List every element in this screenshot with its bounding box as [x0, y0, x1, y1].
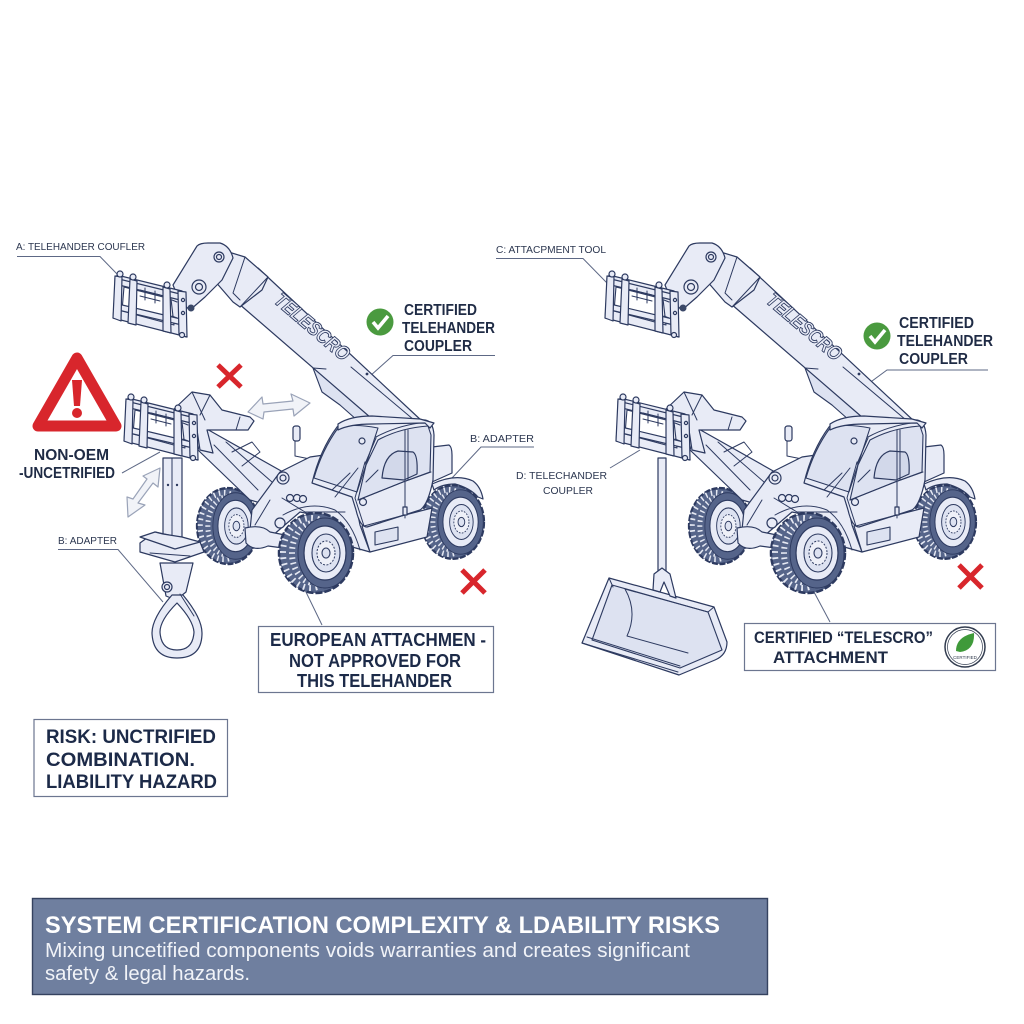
- callout: european attachment: [258, 626, 494, 692]
- label: telechander coupler: [516, 470, 607, 497]
- icon: red cross top: [218, 365, 241, 387]
- leader: adapter lower: [58, 550, 163, 602]
- label: telechander coupler: D: TELECHANDER: [516, 470, 607, 482]
- callout: certified attachment: ATTACHMENT: [773, 648, 889, 667]
- leader: attachment tool: [496, 258, 607, 283]
- label: attachment tool: C: ATTACPMENT TOOL: [496, 244, 606, 256]
- icon: red cross right: [959, 565, 982, 588]
- label: certified coupler: COUPLER: [404, 338, 472, 355]
- label: certified coupler right: COUPLER: [899, 351, 968, 368]
- callout: risk statement: COMBINATION.: [46, 750, 195, 771]
- label: adapter lower: B: ADAPTER: [58, 535, 117, 547]
- adapter base plates: [140, 532, 204, 562]
- double arrow: horizontal: [248, 394, 310, 419]
- leader: telehander coupler A: [17, 256, 118, 275]
- label: certified coupler right: TELEHANDER: [897, 333, 993, 350]
- leader: boom right: [868, 370, 988, 384]
- panel: non-certified combination: [16, 241, 534, 692]
- label: telechander coupler: COUPLER: [543, 485, 593, 497]
- adapter post: [163, 458, 182, 542]
- icon: red cross bottom: [462, 570, 485, 593]
- body text: safety & legal hazards.: [45, 963, 250, 985]
- icon: eco seal: CERTIFIED: [953, 655, 978, 660]
- bucket attachment: [582, 568, 727, 675]
- label: certified coupler: CERTIFIED: [404, 302, 477, 319]
- label: telehander coupler A: A: TELEHANDER COUFLER: [16, 241, 145, 253]
- leader: right wheel: [814, 592, 830, 622]
- callout: european attachment: NOT APPROVED FOR: [289, 651, 461, 671]
- leader: telechander coupler: [610, 450, 640, 468]
- label: non-OEM warning: -UNCETRIFIED: [19, 465, 115, 482]
- callout: risk statement: LIABILITY HAZARD: [46, 772, 217, 793]
- leader: rear adapter: [452, 447, 534, 478]
- banner: summary: [32, 898, 768, 994]
- leader: non-OEM: [122, 452, 160, 473]
- label: adapter rear: B: ADAPTER: [470, 433, 534, 445]
- label: certified coupler right: CERTIFIED: [899, 315, 974, 332]
- telehander machine, right: [605, 243, 976, 593]
- double arrow: diagonal: [127, 468, 160, 517]
- icon: eco seal: [945, 627, 985, 667]
- telehander machine, left: [113, 243, 484, 593]
- text: boom brand: TELESCRO: [270, 289, 354, 366]
- label: certified coupler right: [897, 315, 993, 368]
- body text: [45, 940, 690, 985]
- callout: risk statement: [34, 720, 228, 796]
- icon: red warning triangle: [38, 358, 116, 426]
- icon: green check right: [864, 322, 890, 350]
- callout: european attachment: THIS TELEHANDER: [297, 671, 452, 691]
- label: certified coupler: TELEHANDER: [402, 320, 495, 337]
- callout: certified attachment: [744, 624, 996, 670]
- label: certified coupler: [402, 302, 495, 355]
- support rod: [658, 458, 666, 572]
- callout: risk statement: RISK: UNCTRIFIED: [46, 727, 216, 748]
- body text: Mixing uncetified components voids warranties and creates significant: [45, 940, 690, 962]
- leader: boom: [370, 356, 495, 376]
- crane hook: [152, 563, 202, 658]
- callout: certified attachment: CERTIFIED “TELESCRO”: [754, 628, 933, 647]
- text: boom brand right: TELESCRO: [762, 289, 846, 366]
- callout: european attachment: EUROPEAN ATTACHMEN -: [270, 630, 486, 650]
- icon: green check: [366, 308, 394, 336]
- leader: front wheel: [305, 590, 322, 625]
- label: non-OEM warning: NON-OEM: [34, 447, 109, 464]
- label: non-OEM warning: [19, 447, 115, 482]
- heading: SYSTEM CERTIFICATION COMPLEXITY & LDABILITY RISKS: [45, 912, 720, 939]
- panel: certified combination: [496, 243, 996, 675]
